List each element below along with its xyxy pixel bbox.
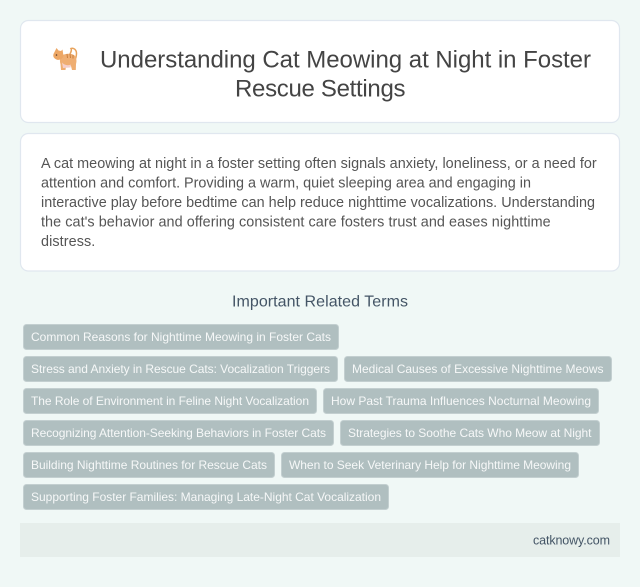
tag [24, 324, 338, 350]
tag: The Role of Environment in Feline Night Vocalization [31, 394, 309, 408]
footer source text: catknowy.com [533, 534, 610, 548]
footer [20, 523, 620, 557]
text block: description [41, 156, 597, 250]
text block: description: A cat meowing at night in a foster setting often signals anxiety, loneliness, or a need for [41, 156, 597, 172]
tag: Building Nighttime Routines for Rescue Cats [31, 458, 267, 472]
panel: title card [20, 20, 620, 122]
text block: description: the cat's behavior and offering consistent care fosters trust and eases nighttime [41, 214, 551, 230]
title: Understanding Cat Meowing at Night in Foster [100, 46, 591, 74]
tag [24, 484, 388, 510]
tag [282, 452, 578, 478]
tag [24, 388, 316, 414]
tag: Stress and Anxiety in Rescue Cats: Vocalization Triggers [31, 362, 330, 376]
tag [340, 420, 600, 446]
tag [344, 356, 612, 382]
heading: related terms: Important Related Terms [232, 294, 408, 310]
tag [324, 388, 598, 414]
title: Rescue Settings [235, 76, 406, 102]
tag: Strategies to Soothe Cats Who Meow at Night [348, 426, 592, 440]
tag [24, 452, 274, 478]
tag: Recognizing Attention-Seeking Behaviors in Foster Cats [31, 426, 326, 440]
tag list [24, 324, 612, 510]
text block: description: distress. [41, 234, 95, 250]
text block: description: attention and comfort. Providing a warm, quiet sleeping area and engaging in [41, 176, 531, 192]
tag [24, 420, 334, 446]
tag: Supporting Foster Families: Managing Late-Night Cat Vocalization [31, 490, 381, 504]
icon: cat [53, 48, 76, 70]
tag: When to Seek Veterinary Help for Nighttime Meowing [289, 458, 571, 472]
panel: description [20, 134, 620, 271]
title [100, 46, 591, 102]
tag: Medical Causes of Excessive Nighttime Meows [352, 362, 604, 376]
tag [24, 356, 338, 382]
text block: description: interactive play before bedtime can help reduce nighttime vocalizations. Understanding [41, 195, 595, 211]
tag: How Past Trauma Influences Nocturnal Meowing [331, 394, 591, 408]
tag: Common Reasons for Nighttime Meowing in Foster Cats [31, 330, 331, 344]
